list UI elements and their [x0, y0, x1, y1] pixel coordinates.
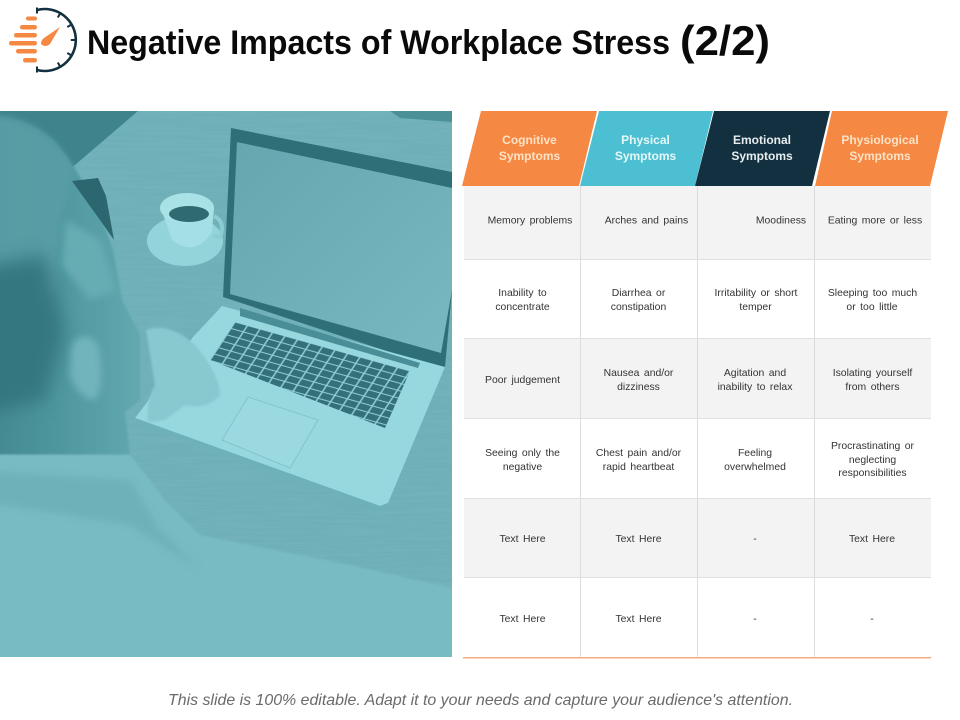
- row 3: Agitation and: [724, 368, 786, 379]
- row 2: temper: [739, 302, 772, 313]
- header: Physiological Symptoms: Physiological: [841, 133, 919, 147]
- row 2: Sleeping too much: [828, 288, 917, 299]
- header: Physiological Symptoms: Symptoms: [849, 149, 911, 163]
- row 3: Poor judgement: [485, 375, 560, 386]
- row 1: Memory problems: [488, 216, 572, 226]
- row 2: concentrate: [495, 302, 550, 313]
- row 1: [488, 216, 922, 226]
- row 4: Seeing only the: [485, 448, 560, 459]
- row 2: Diarrhea or: [612, 288, 666, 299]
- row 4: Chest pain and/or: [596, 448, 682, 459]
- row 2: [495, 288, 917, 313]
- row 6: Text Here: [615, 614, 662, 625]
- row 2: or too little: [846, 302, 898, 313]
- row 6: -: [753, 614, 757, 625]
- header: Cognitive Symptoms: Cognitive: [502, 133, 557, 147]
- coffee cup and saucer: [147, 193, 223, 266]
- man's head, neck and hair: [0, 116, 140, 455]
- header: Emotional Symptoms: Symptoms: [731, 149, 793, 163]
- row 2: constipation: [611, 302, 666, 313]
- title: Negative Impacts of Workplace Stress: [87, 24, 670, 62]
- row 2: Inability to: [498, 288, 547, 299]
- row 4: Feeling: [738, 448, 772, 459]
- keyboard: [210, 322, 410, 428]
- row 6: -: [870, 614, 874, 625]
- row 3: Nausea and/or: [604, 368, 674, 379]
- photo: man at laptop with teal duotone: [0, 111, 470, 680]
- header: Physiological Symptoms: [815, 111, 948, 186]
- row 2: Irritability or short: [715, 288, 798, 299]
- header: Emotional Symptoms: [695, 111, 830, 186]
- row 3: from others: [845, 382, 900, 393]
- row 3: Isolating yourself: [833, 368, 912, 379]
- wall corner in the dark background: [0, 111, 452, 166]
- icon: stopwatch with speed lines: [9, 8, 76, 72]
- row 4: rapid heartbeat: [603, 462, 674, 473]
- row 5: -: [753, 534, 757, 545]
- hand under chin: [146, 328, 220, 422]
- row 1: Arches and pains: [605, 216, 688, 226]
- table wood texture: [0, 111, 452, 657]
- header: Cognitive Symptoms: [462, 111, 597, 186]
- header: Cognitive Symptoms: Symptoms: [499, 149, 560, 163]
- row 5: [499, 534, 895, 545]
- ear: [70, 336, 101, 400]
- title: (2/2): [680, 17, 770, 64]
- shirt: [0, 454, 452, 657]
- row 1: Eating more or less: [828, 216, 922, 226]
- laptop base: [135, 306, 445, 508]
- row 6: [499, 614, 874, 625]
- trackpad: [222, 397, 318, 468]
- row 5: Text Here: [849, 534, 895, 545]
- row 3: dizziness: [617, 382, 660, 393]
- row 6: Text Here: [499, 614, 546, 625]
- header: Physical Symptoms: Physical: [621, 133, 670, 147]
- row 4: [485, 441, 915, 479]
- row 3: [485, 368, 912, 393]
- row 3: inability to relax: [718, 382, 793, 393]
- header: Physical Symptoms: [580, 111, 713, 186]
- sunglasses on head: [72, 178, 114, 240]
- row 4: neglecting: [849, 455, 896, 466]
- footer note: This slide is 100% editable. Adapt it to your needs and capture your audience's attention.: [168, 692, 793, 709]
- row 4: Procrastinating or: [831, 441, 915, 452]
- header: Physical Symptoms: Symptoms: [615, 149, 676, 163]
- row 4: negative: [503, 462, 542, 473]
- laptop screen: [223, 128, 452, 367]
- row 4: overwhelmed: [724, 462, 786, 473]
- row 5: Text Here: [615, 534, 662, 545]
- header: Emotional Symptoms: Emotional: [733, 133, 791, 147]
- row 5: Text Here: [499, 534, 546, 545]
- table: symptoms: [462, 111, 948, 658]
- row 4: responsibilities: [838, 468, 907, 479]
- row 1: Moodiness: [756, 216, 806, 226]
